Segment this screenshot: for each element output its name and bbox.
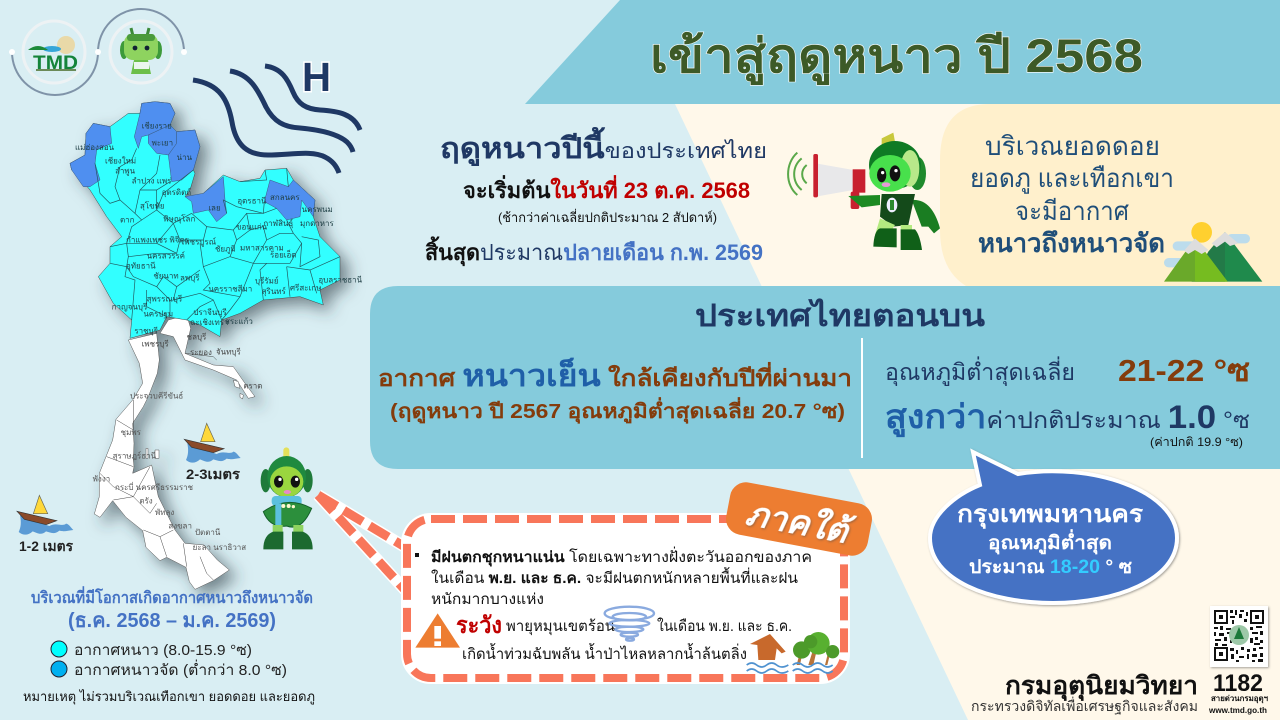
right statement: above normal: สูงกว่า ค่าปกติประมาณ 1.0 °ซ: [885, 398, 1250, 438]
box: [407, 519, 844, 678]
map: province labels: สงขลา: [168, 521, 192, 530]
panel background: [940, 104, 1280, 286]
megaphone: [813, 154, 865, 209]
map: province labels: ตรัง: [139, 496, 153, 505]
map: province labels: เชียงราย: [142, 121, 172, 130]
icon: boat 2-3 metres: [184, 423, 241, 463]
sound waves: [788, 153, 807, 195]
legend: cold: อากาศหนาว (8.0-15.9 °ซ): [74, 642, 252, 659]
map: province labels: ขอนแก่น: [236, 222, 268, 231]
map: province labels: สุโขทัย: [140, 200, 165, 210]
map: province labels: อุทัยธานี: [126, 261, 156, 270]
map: province labels: เลย: [208, 204, 221, 213]
map: province labels: [75, 121, 363, 552]
map: province labels: ระยอง: [190, 348, 212, 357]
map: province labels: ตราด: [243, 381, 262, 390]
icon: mini mascot: [120, 28, 162, 74]
map: province labels: สระแก้ว: [225, 317, 253, 326]
icon: tornado: [605, 607, 654, 641]
map: province labels: ปัตตานี: [195, 528, 221, 537]
map: southern province borders: [100, 353, 217, 580]
map: province labels: แม่ฮ่องสอน: [75, 143, 115, 152]
map: province labels: สุรินทร์: [262, 286, 287, 296]
left statement: [378, 357, 852, 425]
caption: cold area heading: [31, 586, 313, 632]
callout: Bangkok: กรุงเทพมหานคร: [957, 501, 1143, 530]
south text: พายุหมุนเขตร้อน: [506, 618, 615, 636]
map: province labels: น่าน: [177, 153, 193, 162]
map: province labels: มุกดาหาร: [300, 219, 335, 228]
map: province labels: ราชบุรี: [134, 326, 159, 335]
map: province labels: กาญจนบุรี: [112, 302, 148, 311]
map: province labels: นครราชสีมา: [208, 285, 252, 294]
map: province labels: ยะลา นราธิวาส: [193, 543, 246, 552]
right statement: average low: [885, 353, 1250, 388]
panel background: [370, 286, 1280, 469]
map: province labels: กาฬสินธุ์: [263, 218, 293, 228]
map: province labels: ชัยภูมิ: [215, 245, 236, 255]
hotline: www.tmd.go.th: [1208, 706, 1267, 715]
map: province labels: ฉะเชิงเทรา: [190, 318, 229, 327]
dashed callout tail: [318, 495, 405, 590]
map: province labels: สุราษฎร์ธานี: [113, 450, 157, 460]
map: province labels: ร้อยเอ็ด: [270, 250, 296, 260]
label: 2-3 metres: 2-3เมตร: [186, 466, 241, 482]
map: province labels: ลำปาง แพร่: [132, 176, 172, 185]
map: province labels: ลพบุรี: [180, 274, 200, 283]
department name: กระทรวงดิจิทัลเพื่อเศรษฐกิจและสังคม: [971, 697, 1198, 715]
panel: mountain tops: [940, 104, 1280, 286]
map: province labels: นครสวรรค์: [147, 250, 185, 260]
callout: Bangkok: [930, 452, 1177, 603]
map: province labels: กำแพงเพชร พิจิตร: [126, 235, 190, 244]
south text: เกิดน้ำท่วมฉับพลัน น้ำป่าไหลหลากน้ำล้นตลิ่ง: [462, 643, 747, 663]
map: province borders: [95, 148, 340, 320]
map: province labels: กระบี่ นครศรีธรรมราช: [115, 481, 194, 492]
map: province labels: อุดรธานี: [237, 196, 267, 205]
map: province labels: ชุมพร: [121, 428, 142, 437]
south text: ระวัง: [456, 612, 502, 638]
winter period text block: [425, 126, 767, 267]
hotline: สายด่วนกรมอุตุฯ: [1211, 694, 1268, 704]
tag: south: [723, 480, 875, 558]
map: province labels: อุตรดิตถ์: [162, 187, 191, 197]
map: province labels: จันทบุรี: [216, 347, 241, 356]
map: province labels: ชัยนาท: [153, 272, 179, 281]
map: province labels: ลำพูน: [115, 166, 136, 176]
map: province labels: สุพรรณบุรี: [147, 295, 183, 304]
icon: boat 1-2 metres: [17, 495, 73, 535]
title: เข้าสู่ฤดูหนาว ปี 2568: [650, 29, 1143, 86]
logo: TMD: [28, 36, 78, 74]
icon: high pressure H with wind lines: [193, 54, 360, 173]
icon: high pressure H with wind lines: H: [302, 54, 331, 100]
map: province labels: ประจวบคีรีขันธ์: [130, 390, 183, 400]
right statement: above normal: (ค่าปกติ 19.9 °ซ): [1150, 435, 1243, 449]
left statement: อากาศ หนาวเย็น ใกล้เคียงกับปีที่ผ่านมา: [378, 357, 852, 393]
panel: south region: [407, 480, 875, 678]
map: province labels: สกลนคร: [270, 193, 300, 202]
winter period text block: ฤดูหนาวปีนี้ ของประเทศไทย: [440, 126, 767, 166]
map: province labels: เชียงใหม่: [105, 156, 136, 165]
map: province labels: นครพนม: [302, 205, 333, 214]
icon: warning: [415, 613, 460, 648]
south text: มีฝนตกชุกหนาแน่น โดยเฉพาะทางฝั่งตะวันออกของภาค: [431, 546, 812, 567]
department name: [971, 672, 1198, 715]
hotline: [1208, 670, 1268, 715]
panel: upper Thailand: [370, 286, 1280, 469]
caption: cold area heading: (ธ.ค. 2568 – ม.ค. 2569): [68, 610, 276, 632]
right statement: average low: อุณหภูมิต่ำสุดเฉลี่ย: [885, 356, 1075, 386]
panel text: จะมีอากาศ: [1015, 196, 1129, 226]
right statement: average low: 21-22 °ซ: [1118, 353, 1250, 388]
icon: flooded trees: [793, 632, 839, 673]
winter period text block: (ช้ากว่าค่าเฉลี่ยปกติประมาณ 2 สัปดาห์): [498, 209, 717, 225]
panel text: หนาวถึงหนาวจัด: [978, 228, 1165, 258]
winter period text block: สิ้นสุดประมาณปลายเดือน ก.พ. 2569: [425, 236, 763, 267]
winter period text block: จะเริ่มต้นในวันที่ 23 ต.ค. 2568: [463, 174, 750, 203]
megaphone mascot: [788, 133, 940, 250]
south text: [415, 546, 812, 663]
icons: [415, 607, 839, 673]
decorative arcs and rings: [9, 9, 187, 95]
legend: [51, 641, 287, 679]
mascot with flowers: [261, 447, 313, 549]
logos group: [9, 9, 187, 95]
panel text: บริเวณยอดดอย: [985, 131, 1160, 161]
background: cream diagonal area: [675, 104, 1280, 720]
map: province labels: เพชรบูรณ์: [182, 236, 217, 247]
hotline: 1182: [1213, 670, 1263, 697]
callout: Bangkok: ประมาณ 18-20 ° ซ: [969, 557, 1132, 578]
map: very cold provinces: [70, 102, 315, 222]
legend: very cold: อากาศหนาวจัด (ต่ำกว่า 8.0 °ซ): [74, 659, 287, 679]
label: 1-2 metres: 1-2 เมตร: [19, 538, 73, 554]
map: province labels: มหาสารคาม: [240, 244, 284, 253]
map of Thailand: [70, 102, 363, 589]
icon: flooded house: [747, 634, 788, 673]
south text: ในเดือน พ.ย. และ ธ.ค. จะมีฝนตกหนักหลายพื้นที่และฝน: [431, 567, 798, 587]
panel heading: ประเทศไทยตอนบน: [695, 298, 986, 333]
map: province labels: ตาก: [120, 216, 135, 225]
map: province labels: ชลบุรี: [187, 332, 207, 341]
map: province labels: พิษณุโลก: [163, 214, 195, 224]
caption: cold area heading: บริเวณที่มีโอกาสเกิดอากาศหนาวถึงหนาวจัด: [31, 586, 313, 607]
logo: TMD: TMD: [33, 53, 78, 74]
panel text: ยอดภู และเทือกเขา: [970, 163, 1174, 194]
south text: ในเดือน พ.ย. และ ธ.ค.: [657, 617, 792, 635]
map: province labels: ปราจีนบุรี: [193, 308, 227, 317]
panel text: [970, 131, 1174, 258]
divider: [861, 338, 863, 458]
map: province labels: นครปฐม: [143, 310, 173, 319]
south text: หนักมากบางแห่ง: [431, 591, 544, 608]
map: land areas with shadow: [70, 102, 340, 589]
mascot: [848, 133, 940, 250]
callout: Bangkok: อุณหภูมิต่ำสุด: [988, 529, 1112, 555]
map: province labels: พัทลุง: [155, 508, 174, 517]
header band: [525, 0, 1280, 104]
tag: south: ภาคใต้: [743, 492, 858, 552]
note: หมายเหตุ ไม่รวมบริเวณเทือกเขา ยอดดอย และยอดภู: [23, 689, 315, 705]
map: province labels: พะเยา: [152, 138, 173, 147]
map: province labels: เพชรบุรี: [142, 340, 169, 349]
icon: mountains: [1164, 222, 1262, 282]
department name: กรมอุตุนิยมวิทยา: [1005, 672, 1198, 702]
map: province labels: บุรีรัมย์: [255, 275, 279, 285]
QR code: [1210, 606, 1268, 667]
left statement: (ฤดูหนาว ปี 2567 อุณหภูมิต่ำสุดเฉลี่ย 20.7 °ซ): [390, 396, 845, 425]
map: province labels: ศรีสะเกษ: [290, 284, 321, 293]
map: province labels: พังงา: [93, 475, 110, 484]
map: province labels: อุบลราชธานี: [318, 276, 363, 285]
